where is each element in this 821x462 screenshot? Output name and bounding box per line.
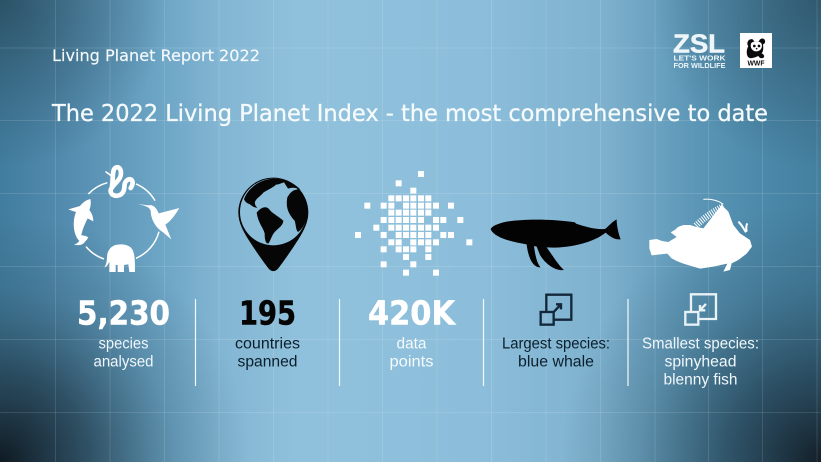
icon: blue whale xyxy=(491,219,621,270)
logo: ZSL: LET'S WORK xyxy=(674,54,726,62)
stat: data points: data xyxy=(396,336,427,352)
logo: ZSL xyxy=(673,28,726,70)
text: smallest species: Smallest species: xyxy=(642,336,759,352)
icon: spinyhead blenny xyxy=(649,199,752,272)
fish xyxy=(68,199,93,245)
stat: countries xyxy=(235,294,300,370)
stat: data points xyxy=(368,294,456,370)
logo: ZSL: ZSL xyxy=(673,28,725,58)
logo: WWF panda xyxy=(740,33,772,68)
report label: Living Planet Report 2022 xyxy=(52,46,260,65)
stat: countries: 195 xyxy=(239,294,296,332)
logo: ZSL: FOR WILDLIFE xyxy=(674,61,726,70)
text: largest species xyxy=(502,336,610,370)
elephant xyxy=(104,244,135,272)
icon: data point squares xyxy=(355,171,472,276)
ring arcs xyxy=(86,183,159,259)
stat: countries: countries xyxy=(235,336,300,352)
stat: species: species xyxy=(98,336,149,352)
icon: species ring xyxy=(68,167,179,272)
stat: countries: spanned xyxy=(238,354,298,370)
title: The 2022 Living Planet Index - the most comprehensive to date xyxy=(51,99,768,127)
stat: data points: points xyxy=(390,354,434,370)
snake xyxy=(106,167,133,196)
logo: WWF panda: WWF xyxy=(748,60,765,68)
text: smallest species xyxy=(642,336,759,388)
text: largest species: blue whale xyxy=(518,354,594,370)
stat: species: analysed xyxy=(94,354,154,370)
stat: species: 5,230 xyxy=(77,294,170,332)
icon: globe pin xyxy=(238,178,308,271)
icon: enlarge xyxy=(541,295,571,325)
text: smallest species: spinyhead xyxy=(664,354,736,370)
icon: shrink xyxy=(685,294,716,325)
text: largest species: Largest species: xyxy=(502,336,610,352)
stat: data points: 420K xyxy=(368,294,456,332)
text: smallest species: blenny fish xyxy=(664,372,738,388)
hummingbird xyxy=(138,204,179,239)
stat: species xyxy=(77,294,170,370)
